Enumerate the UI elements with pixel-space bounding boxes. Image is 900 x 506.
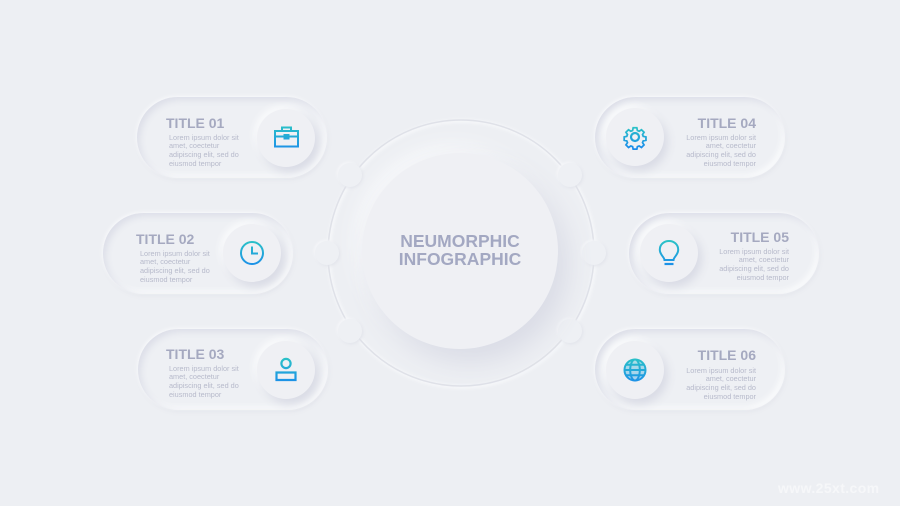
text block	[169, 364, 239, 399]
knob	[606, 108, 664, 166]
icon: clock	[240, 241, 264, 265]
text block	[169, 132, 239, 168]
ring node top right	[558, 163, 582, 187]
text block	[686, 366, 756, 401]
heading: TITLE 06	[698, 347, 756, 363]
text block: amet, coectetur	[169, 141, 219, 150]
watermark: www.25xt.com	[778, 480, 880, 496]
text block: amet, coectetur	[706, 374, 756, 383]
central disc	[362, 153, 558, 349]
knob	[640, 224, 698, 282]
heading: TITLE 05	[731, 229, 789, 245]
text block: Lorem ipsum dolor sit	[140, 248, 210, 258]
knob	[257, 341, 315, 399]
heading: TITLE 02	[136, 231, 194, 247]
heading: TITLE 03	[166, 346, 224, 362]
text block: adipiscing elit, sed do	[169, 381, 239, 390]
panel: title 04	[595, 97, 785, 178]
icon: briefcase	[274, 126, 299, 148]
text block: adipiscing elit, sed do	[686, 383, 756, 392]
ring node top left	[338, 163, 362, 187]
ring node bottom right	[558, 319, 582, 343]
knob	[223, 224, 281, 282]
text block: Lorem ipsum dolor sit	[169, 364, 239, 372]
text block: Lorem ipsum dolor sit	[169, 132, 239, 142]
text block: Lorem ipsum dolor sit	[686, 366, 756, 374]
text block: eiusmod tempor	[169, 159, 221, 168]
text block: adipiscing elit, sed do	[686, 150, 756, 159]
panel: title 06	[595, 329, 785, 410]
knob	[606, 341, 664, 399]
text block: adipiscing elit, sed do	[169, 150, 239, 159]
panel: central dial	[328, 120, 606, 386]
text block	[140, 248, 210, 284]
heading: neumorphic infographic: NEUMORPHIC	[400, 231, 520, 251]
text block: eiusmod tempor	[737, 273, 789, 282]
text block: eiusmod tempor	[704, 159, 756, 168]
text block: eiusmod tempor	[169, 390, 221, 399]
heading: neumorphic infographic: INFOGRAPHIC	[399, 248, 521, 268]
ring node middle left	[315, 241, 339, 265]
heading: neumorphic infographic	[399, 231, 521, 268]
outer ring	[328, 120, 594, 386]
text block: Lorem ipsum dolor sit	[719, 246, 789, 256]
text block	[719, 246, 789, 282]
icon: globe	[624, 358, 646, 382]
text block: adipiscing elit, sed do	[719, 264, 789, 273]
heading: TITLE 04	[698, 115, 756, 131]
text block	[686, 132, 756, 168]
ring node middle right	[582, 241, 606, 265]
icon: user	[275, 358, 297, 382]
heading: TITLE 01	[166, 115, 224, 131]
text block: eiusmod tempor	[704, 392, 756, 401]
text block: amet, coectetur	[169, 372, 219, 381]
icon: gear	[623, 126, 647, 150]
text block: adipiscing elit, sed do	[140, 266, 210, 275]
text block: amet, coectetur	[140, 257, 190, 266]
ring node bottom left	[338, 319, 362, 343]
icon: light bulb	[658, 240, 680, 266]
text block: Lorem ipsum dolor sit	[686, 132, 756, 142]
panel: title 02	[103, 213, 293, 294]
panel: title 05	[629, 213, 819, 294]
panel: title 01	[137, 97, 327, 178]
text block: eiusmod tempor	[140, 275, 192, 284]
knob	[257, 109, 315, 167]
text block: amet, coectetur	[706, 141, 756, 150]
panel: title 03	[138, 329, 328, 410]
text block: amet, coectetur	[739, 255, 789, 264]
